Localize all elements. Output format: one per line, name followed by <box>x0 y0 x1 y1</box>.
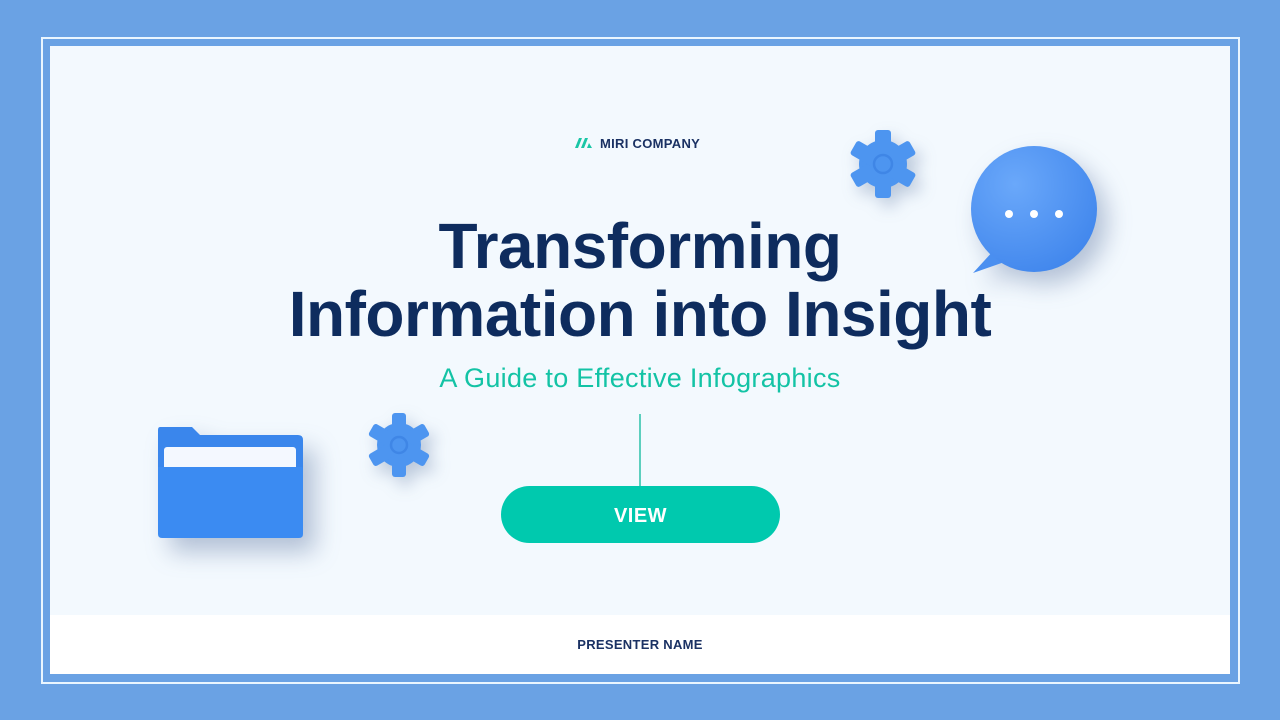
icon: logo mark <box>575 138 592 148</box>
footer bar <box>50 615 1230 674</box>
footer bar: PRESENTER NAME <box>577 637 703 652</box>
icon: gear bottom <box>368 413 440 491</box>
connector line <box>639 414 641 486</box>
icon: speech bubble <box>969 146 1119 296</box>
button: VIEW <box>501 486 780 543</box>
title <box>289 210 992 350</box>
subtitle: A Guide to Effective Infographics <box>439 363 841 393</box>
title: Information into Insight <box>289 278 991 350</box>
brand logo: MIRI COMPANY <box>600 136 700 150</box>
icon: gear top <box>850 130 926 212</box>
title: Transforming <box>439 210 841 282</box>
icon: folder <box>157 427 328 565</box>
button: VIEW: VIEW <box>614 505 667 527</box>
